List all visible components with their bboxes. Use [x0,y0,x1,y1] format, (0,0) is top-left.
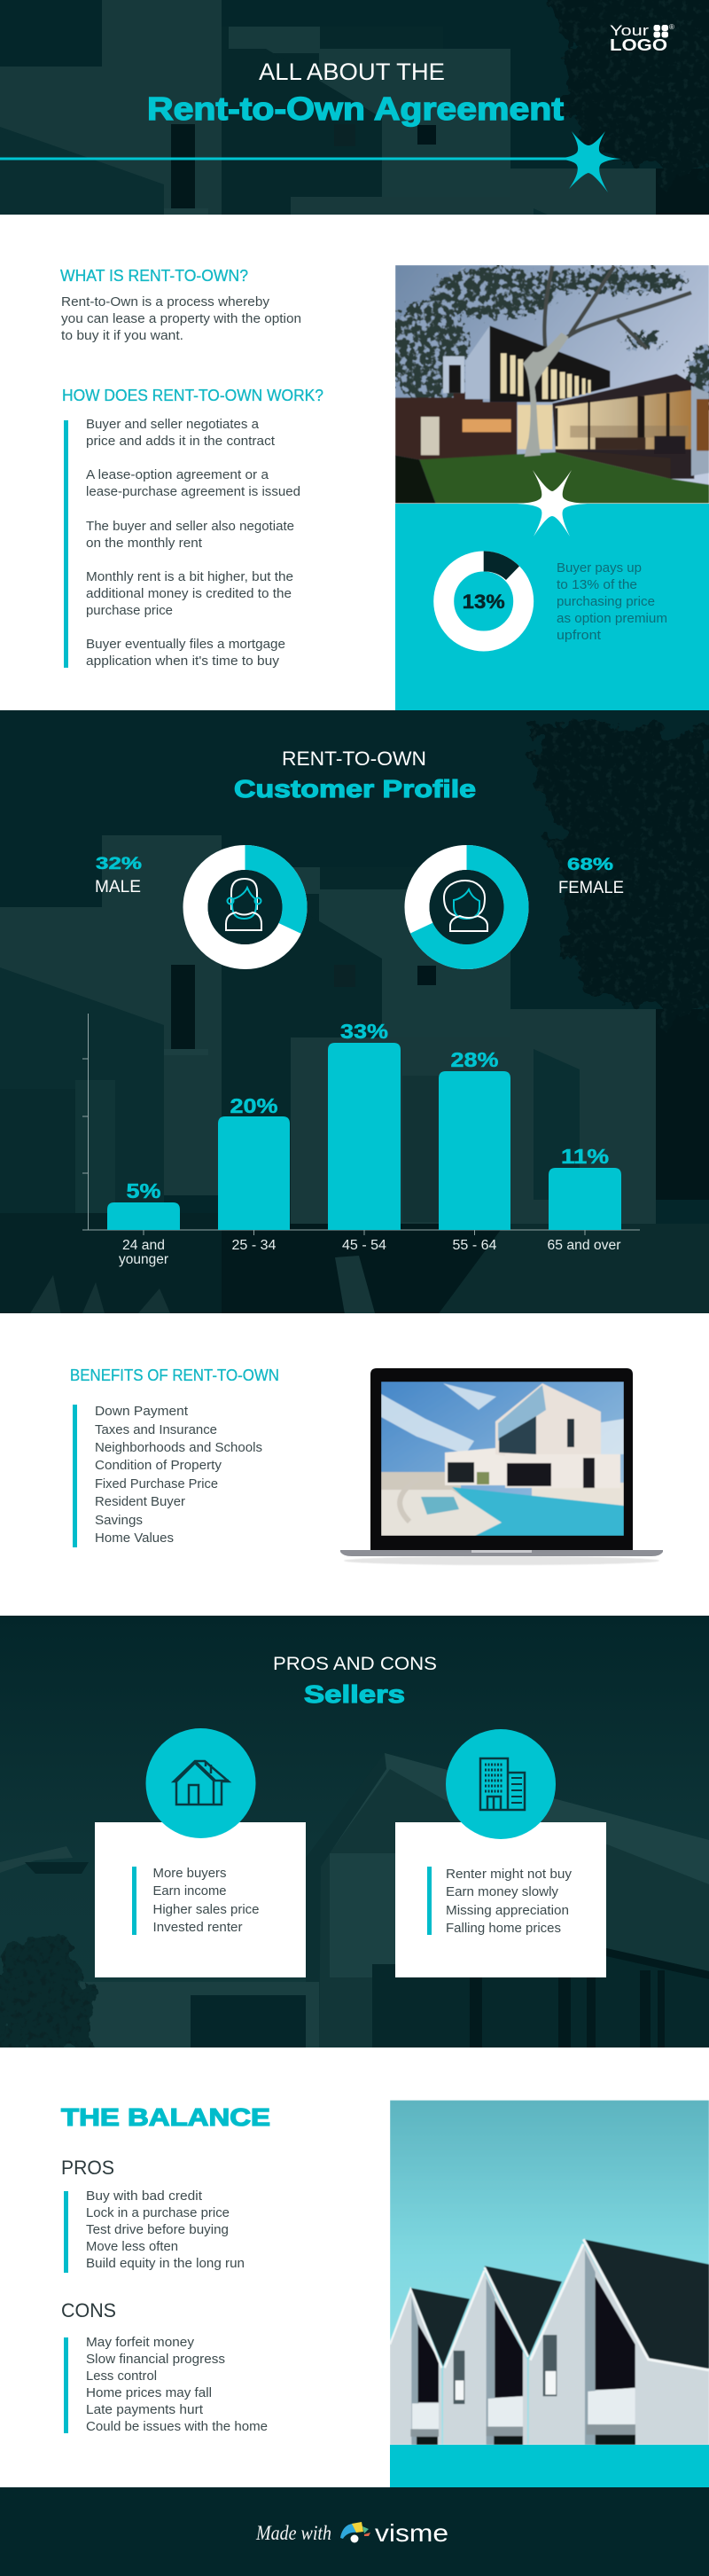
text block: definition: you can lease a property with the option [61,311,301,326]
bar: 45-54 [328,1020,401,1253]
bar: 25-34: 25 - 34 [232,1238,277,1253]
donut: female [417,857,516,957]
logo [610,22,674,54]
bar: 45-54: 45 - 54 [342,1238,386,1253]
donut: 13% [444,552,524,641]
teal band [390,2445,709,2487]
list: steps: additional money is credited to the [86,586,292,601]
text block: premium note [557,560,667,643]
heading: customer profile: RENT-TO-OWN [282,748,426,770]
bar: 24 and younger: 24 and [122,1238,165,1253]
list: benefits: Savings [95,1513,143,1528]
stat: male 32%: 32% [96,855,142,873]
list: steps: Monthly rent is a bit higher, but the [86,569,293,584]
photo: modern house at dusk [388,265,709,504]
cons list: Less control [86,2369,157,2384]
icon: visme logo [340,2522,370,2543]
pros list: Build equity in the long run [86,2256,245,2271]
list: steps: purchase price [86,603,173,618]
text block: premium note: Buyer pays up [557,560,642,575]
card: pros: Earn income [152,1883,227,1899]
panel: the balance [61,2103,270,2434]
heading: customer profile: Customer Profile [234,775,476,803]
photo: villa and pool [381,1382,624,1536]
pros list: Buy with bad credit [86,2188,203,2204]
panel: sellers pros and cons [0,1616,709,2057]
bar: 24 and younger: 5% [126,1179,161,1202]
bar: 24 and younger: younger [119,1252,168,1267]
text block: premium note: upfront [557,628,602,643]
logo: ® [669,23,674,31]
text block: premium note: purchasing price [557,594,655,609]
heading: sellers: Sellers [304,1680,405,1708]
card: pros [95,1822,306,1977]
bar: 45-54: 33% [340,1020,388,1043]
list: benefits: Fixed Purchase Price [95,1476,218,1492]
card: pros: Invested renter [152,1920,243,1935]
stat: male 32% [95,855,142,897]
list: benefits: Condition of Property [95,1458,222,1473]
stat: male 32%: MALE [95,878,141,897]
cons list: Slow financial progress [86,2352,225,2367]
stat: female 68%: 68% [567,856,613,874]
heading: how does it work: HOW DOES RENT-TO-OWN WORK? [62,387,323,404]
title: ALL ABOUT THE [259,59,445,85]
cons list: May forfeit money [86,2335,195,2350]
made with: Made with [255,2522,331,2544]
pros list: PROS [61,2157,114,2179]
pros list: Lock in a purchase price [86,2205,230,2220]
card: cons: Missing appreciation [446,1903,569,1918]
cons list: Home prices may fall [86,2385,212,2400]
bar: 55-64: 28% [450,1048,498,1071]
photo: gabled houses [390,2100,709,2445]
star [517,470,588,536]
text block: definition: Rent-to-Own is a process whereby [61,294,270,309]
icon: house [145,1728,255,1838]
list: steps: Buyer eventually files a mortgage [86,637,285,652]
list: benefits: Resident Buyer [95,1494,185,1509]
icon: man [226,879,261,930]
text block: definition: to buy it if you want. [61,328,183,343]
panel: option premium [395,470,709,710]
title [147,59,564,127]
panel: benefits [70,1366,279,1547]
stat: female 68% [558,856,624,897]
cons list [61,2299,268,2434]
list: steps: price and adds it in the contract [86,434,276,449]
card: cons: Falling home prices [446,1921,561,1936]
text block: premium note: to 13% of the [557,577,637,592]
cons list: Could be issues with the home [86,2419,268,2434]
pros list: Test drive before buying [86,2222,229,2237]
card: cons: Earn money slowly [446,1884,558,1899]
panel: how does it work [62,387,323,669]
card: pros: Higher sales price [152,1902,259,1917]
list: benefits: Neighborhoods and Schools [95,1440,262,1455]
list: benefits [95,1404,262,1546]
text block: premium note: as option premium [557,611,667,626]
background building [0,1753,709,2057]
list: steps [86,417,300,669]
heading: benefits: BENEFITS OF RENT-TO-OWN [70,1366,279,1384]
logo: LOGO [610,36,667,54]
bar: 55-64: 55 - 64 [452,1238,497,1253]
heading: sellers [273,1654,437,1708]
footer [0,2487,709,2576]
bar: 65 and over: 65 and over [548,1238,620,1253]
card: cons: Renter might not buy [446,1867,573,1882]
heading: what is rent-to-own: WHAT IS RENT-TO-OWN? [60,267,248,285]
list: steps: lease-purchase agreement is issued [86,484,300,499]
list: steps: application when it's time to buy [86,654,280,669]
bar: 65 and over: 11% [561,1145,609,1168]
icon: woman [444,881,487,931]
laptop with villa photo [340,1368,663,1565]
list: benefits: Taxes and Insurance [95,1422,217,1437]
donut: male [195,857,294,957]
cons list: CONS [61,2299,116,2322]
list: steps: The buyer and seller also negotiate [86,519,294,534]
bar: 24 and younger [107,1179,180,1267]
header banner [0,0,709,215]
visme wordmark: visme [375,2519,448,2547]
bar chart: age [82,1014,640,1267]
card: cons [395,1822,606,1977]
stat: female 68%: FEMALE [558,879,624,897]
panel: customer profile [0,710,709,1319]
text block: definition [61,294,301,343]
panel: what is rent-to-own [60,267,301,343]
logo: Your [610,22,649,39]
bar: 65 and over [548,1145,621,1253]
list: steps: Buyer and seller negotiates a [86,417,260,432]
pros list: Move less often [86,2239,178,2254]
title: Rent-to-Own Agreement [147,90,564,127]
pros list [61,2157,245,2273]
bar: 25-34 [218,1094,290,1253]
heading: customer profile [234,748,476,803]
heading: sellers: PROS AND CONS [273,1654,437,1674]
bar: 25-34: 20% [230,1094,278,1117]
heading: the balance: THE BALANCE [61,2103,270,2131]
icon: building [446,1729,556,1839]
divider line with star [0,131,621,192]
bar: 55-64 [439,1048,510,1253]
list: benefits: Down Payment [95,1404,189,1419]
list: benefits: Home Values [95,1531,174,1546]
donut: 13%: 13% [463,591,505,613]
list: steps: on the monthly rent [86,536,203,551]
list: steps: A lease-option agreement or a [86,467,269,482]
cons list: Late payments hurt [86,2402,204,2417]
card: pros: More buyers [152,1866,227,1881]
